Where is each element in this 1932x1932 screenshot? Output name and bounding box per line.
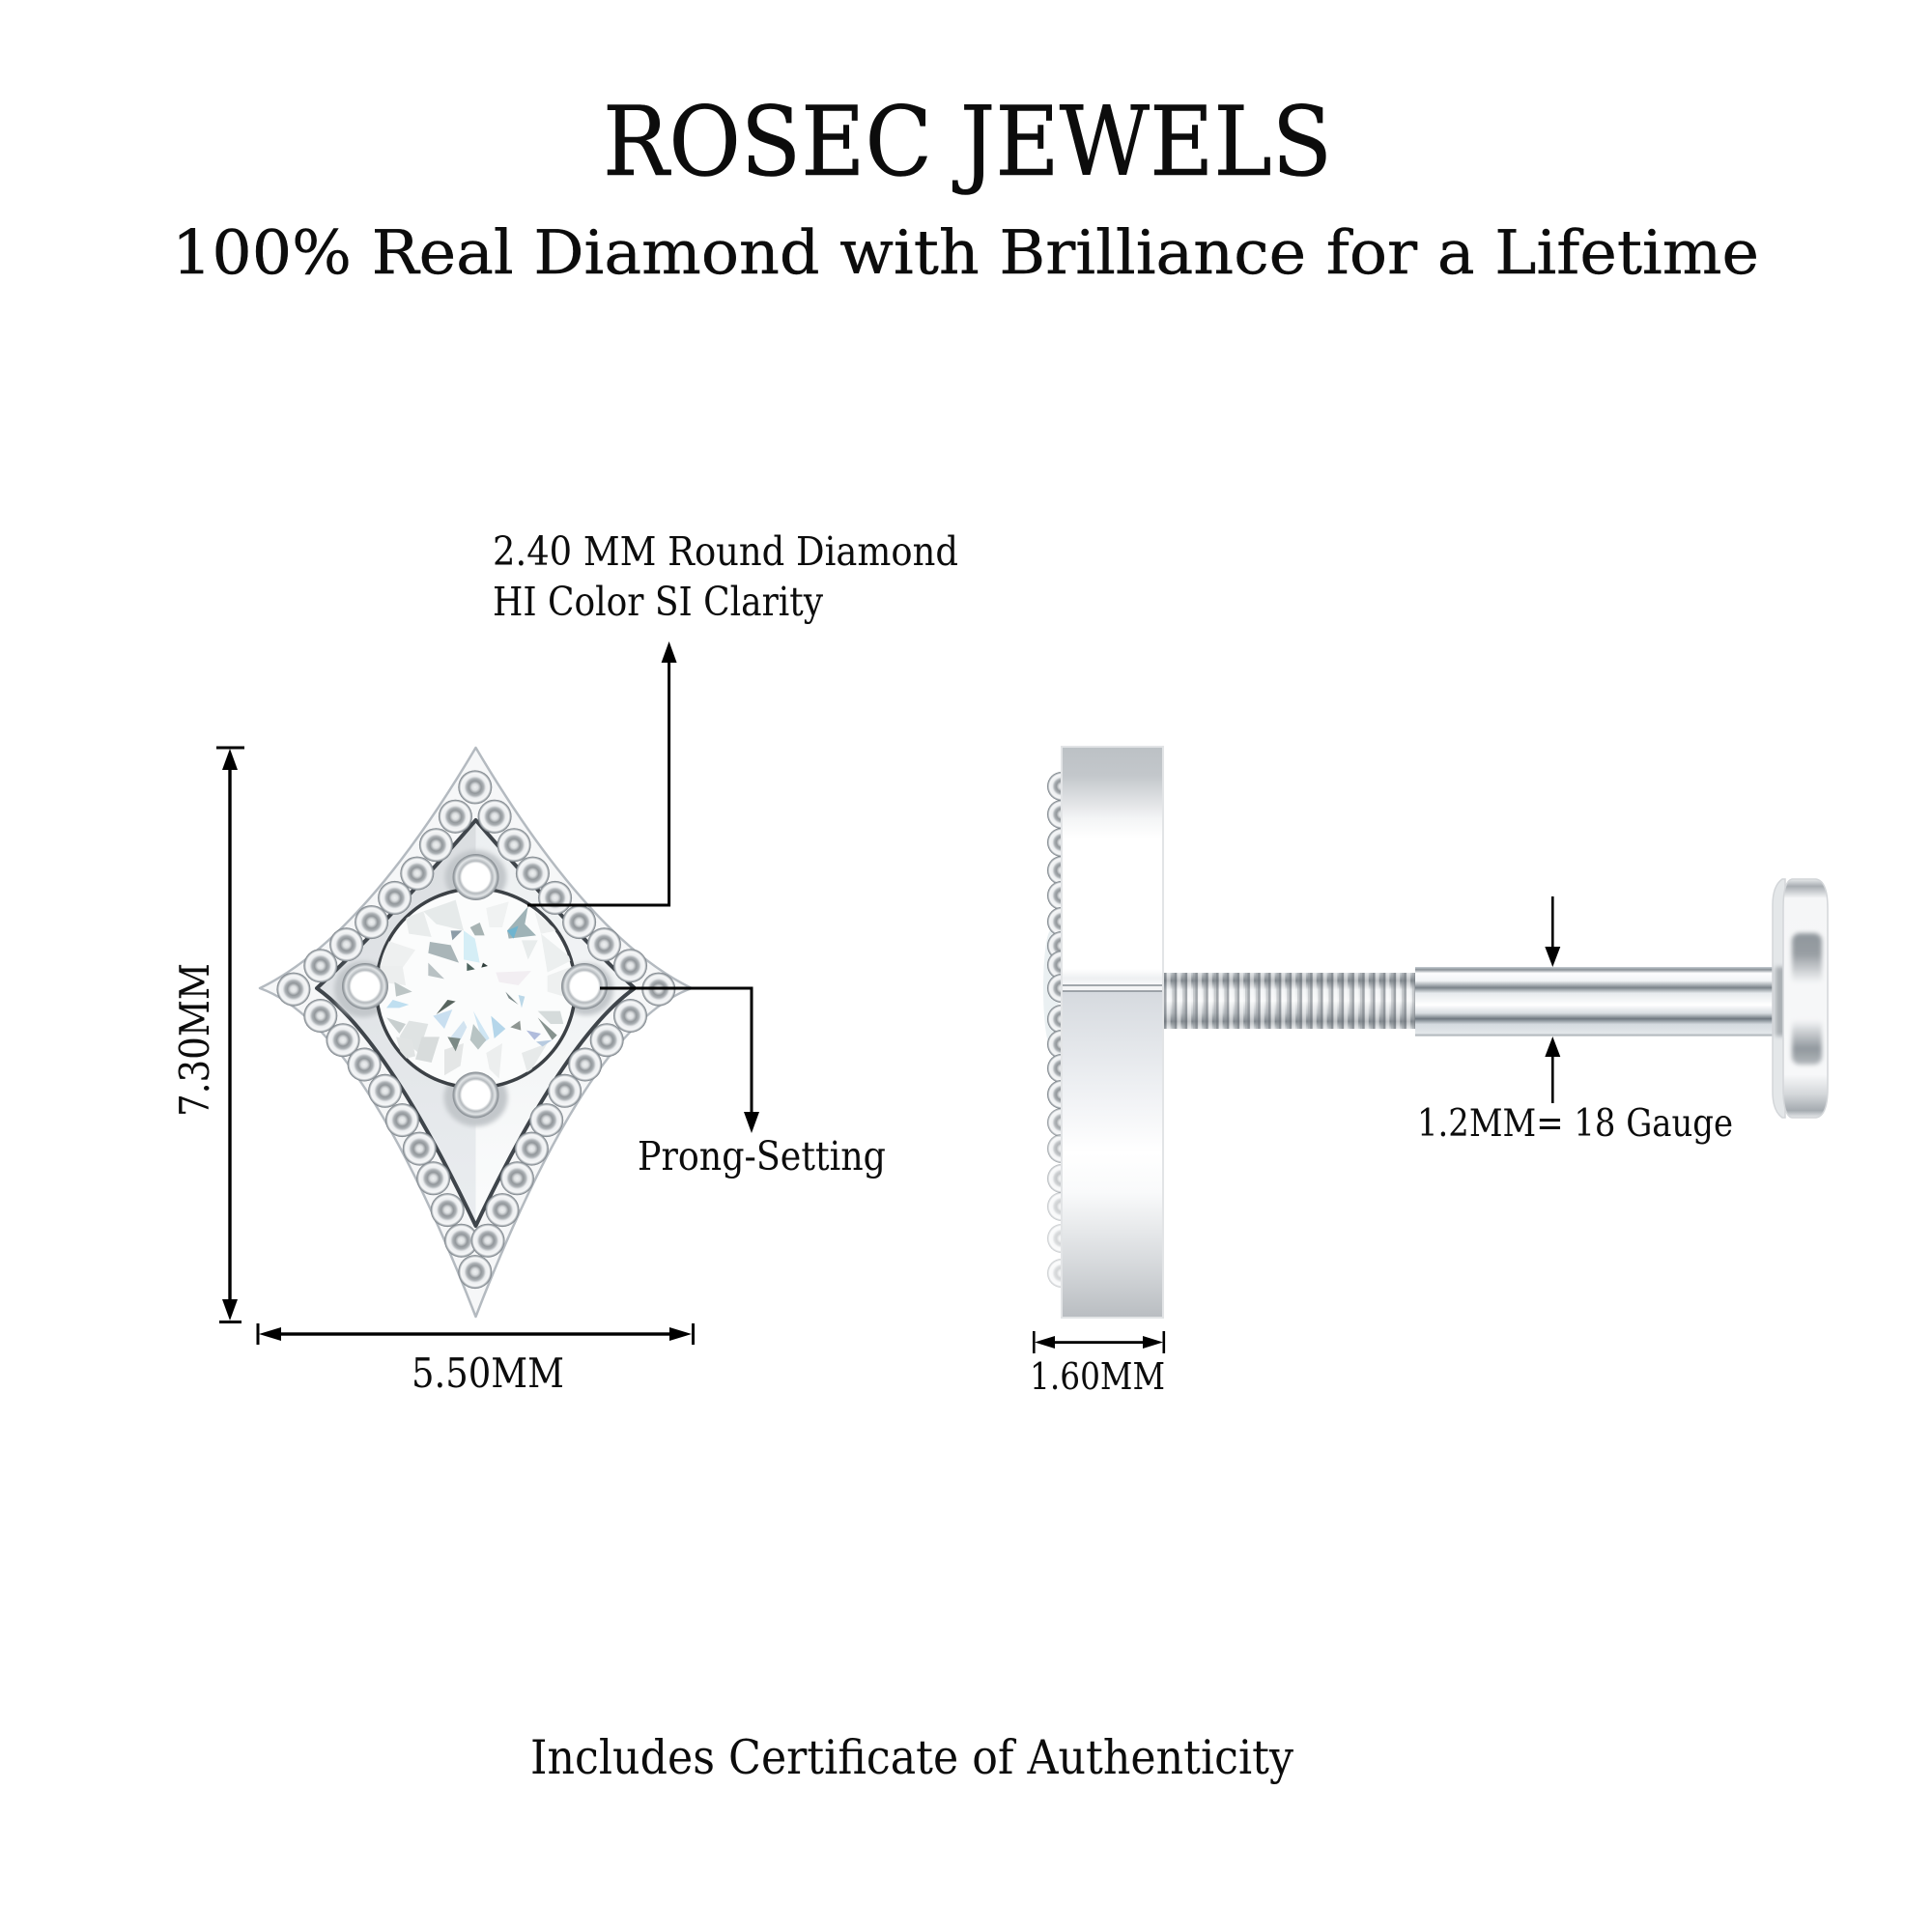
title: ROSEC JEWELS [603,87,1332,198]
dimension: 1.60MM thickness: 1.60MM [1030,1355,1165,1398]
round diamond [377,889,576,1088]
inner star plate [317,820,635,1226]
callout: prong-setting [600,988,886,1179]
callout: round diamond [493,528,958,905]
dimension: 1.60MM thickness [1030,1331,1165,1398]
subtitle: 100% Real Diamond with Brilliance for a Lifetime [172,217,1759,288]
callout: prong-setting: Prong-Setting [638,1133,886,1179]
front view of earring [260,748,692,1317]
side plate [1062,747,1163,1318]
side view of earring [1043,747,1828,1318]
dimension: 7.30MM height: 7.30MM [171,963,218,1117]
certificate note: Includes Certificate of Authenticity [530,1730,1293,1785]
outer star frame [260,748,692,1317]
threaded post [1164,973,1415,1029]
dimension: 5.50MM width [257,1323,695,1397]
callout: round diamond: 2.40 MM Round Diamond [493,528,958,575]
dimension: 1.2MM gauge [1417,896,1733,1146]
halo beads [276,770,675,1289]
back disc [1773,879,1828,1118]
smooth shaft [1415,967,1782,1036]
prongs [342,854,608,1119]
dimension: 1.2MM gauge: 1.2MM= 18 Gauge [1417,1102,1733,1146]
dimension: 5.50MM width: 5.50MM [412,1350,564,1397]
prong shadows [334,850,613,1126]
side beads [1043,772,1076,1288]
callout: round diamond: HI Color SI Clarity [493,579,824,625]
dimension: 7.30MM height [171,746,244,1323]
